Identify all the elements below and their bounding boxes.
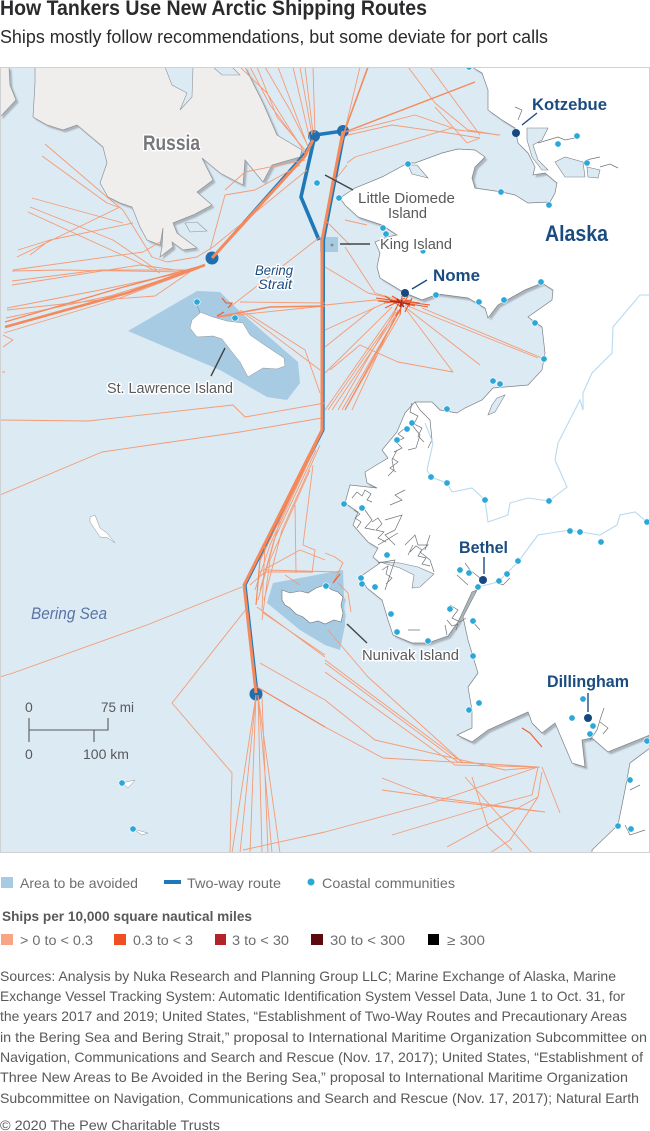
Russia landmass [0, 67, 302, 257]
Nunivak Island [282, 585, 343, 624]
sources: in the Bering Sea and Bering Strait,” proposal to International Maritime Organization Subcommittee on [0, 1029, 647, 1045]
scale bar: 0 [25, 746, 33, 762]
scale bar: 75 mi [101, 699, 134, 715]
legend: ship density: 0.3 to < 3 [133, 932, 193, 948]
label: Bethel: Bethel [459, 538, 508, 557]
sources: the years 2017 and 2019; United States, “Establishment of Two-Way Routes and Precautionary Areas [0, 1008, 627, 1024]
legend: ship density: ≥ 300 [447, 932, 485, 948]
coastal communities [119, 64, 650, 832]
label: Little Diomede Island: Island [388, 205, 427, 222]
leader lines [211, 113, 588, 712]
sources: Sources: Analysis by Nuka Research and Planning Group LLC; Marine Exchange of Alaska, Marine [0, 968, 616, 984]
label: Nome: Nome [433, 266, 480, 285]
sources: Subcommittee on Navigation, Communications and Search and Rescue (Nov. 17, 2017); Natural Earth [0, 1090, 639, 1106]
areas to be avoided [128, 237, 345, 650]
rivers [425, 295, 650, 587]
label: Alaska: Alaska [545, 221, 609, 246]
map panel [0, 64, 650, 853]
scale bar: 100 km [83, 746, 129, 762]
legend heading: Ships per 10,000 square nautical miles [2, 908, 252, 924]
sources: Three New Areas to Be Avoided in the Bering Sea,” proposal to International Maritime Organization [0, 1069, 628, 1085]
legend: ship density [1, 932, 485, 948]
scale bar [25, 699, 134, 762]
legend: ship density: 30 to < 300 [330, 932, 405, 948]
sources [0, 968, 647, 1106]
legend: ship density: 3 to < 30 [232, 932, 289, 948]
subtitle: Ships mostly follow recommendations, but some deviate for port calls [0, 27, 548, 47]
legend: map features: Coastal communities [322, 875, 455, 891]
label: St. Lawrence Island: St. Lawrence Island [107, 380, 233, 397]
ship tracks: main bundles [5, 67, 475, 727]
label: Bering Strait: Bering [255, 262, 293, 278]
label: Little Diomede Island [358, 190, 455, 222]
label: King Island: King Island [380, 236, 452, 253]
label: Russia: Russia [143, 132, 200, 155]
legend: ship density: > 0 to < 0.3 [20, 932, 93, 948]
label: Bering Strait [255, 262, 293, 292]
Alaska landmass [340, 67, 650, 853]
label: Bering Sea: Bering Sea [31, 604, 107, 623]
scale bar: 0 [25, 699, 33, 715]
legend: map features [1, 875, 455, 891]
ship tracks: lightest density [0, 67, 560, 853]
ship tracks: higher density near ports [217, 296, 542, 747]
St. Lawrence Island [190, 305, 285, 377]
label: Nunivak Island: Nunivak Island [362, 647, 459, 664]
label: Bering Strait: Strait [258, 276, 293, 292]
hub cities [401, 129, 592, 722]
legend: map features: Two-way route [187, 875, 281, 891]
label: Dillingham: Dillingham [547, 672, 629, 691]
legend: map features: Area to be avoided [20, 875, 138, 891]
map border [0, 68, 650, 852]
ship tracks: Nome core [390, 299, 410, 307]
route junction markers [206, 125, 349, 700]
two-way route [214, 131, 345, 693]
sources: Exchange Vessel Tracking System: Automatic Identification System Vessel Data, June 1 to Oct. 31, for [0, 988, 625, 1004]
label: Little Diomede Island: Little Diomede [358, 190, 455, 207]
sources: Navigation, Communications and Search and Rescue (Nov. 17, 2017); United States, “Establishment of [0, 1049, 643, 1065]
label: Kotzebue: Kotzebue [532, 95, 607, 114]
St. Matthew and Pribilof islands [90, 244, 333, 835]
land shadow [2, 70, 650, 770]
